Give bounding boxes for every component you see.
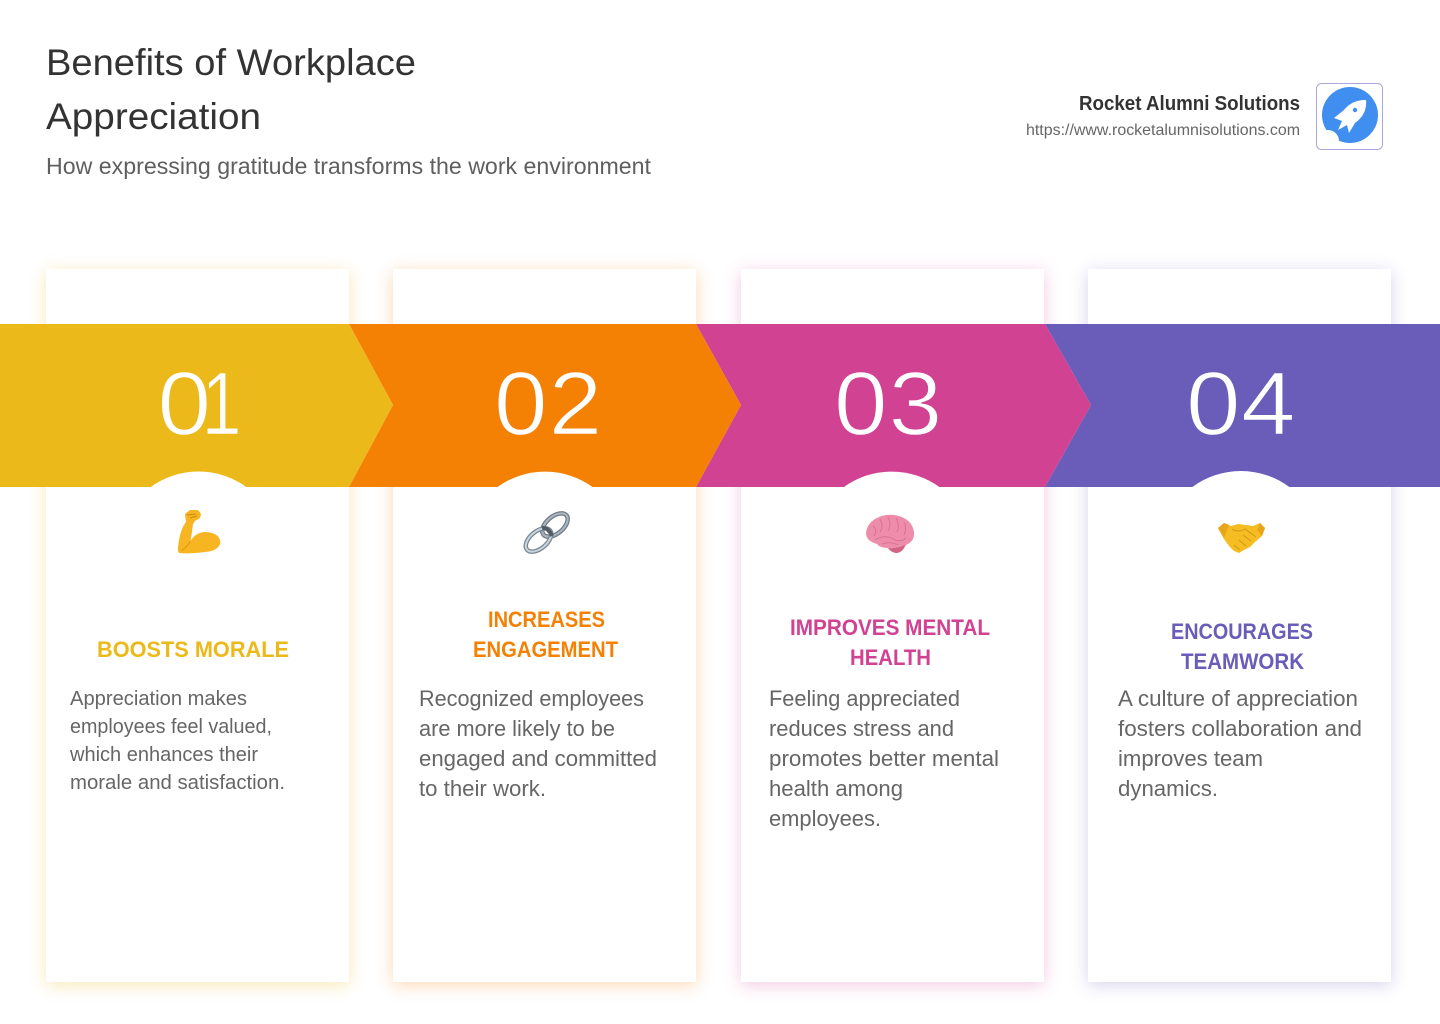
heading: IMPROVES MENTAL (790, 615, 990, 640)
description: employees. (769, 806, 881, 831)
icon: linked chain (522, 509, 572, 556)
description: morale and satisfaction. (70, 771, 285, 794)
heading: HEALTH (850, 645, 931, 670)
description: promotes better mental (769, 746, 999, 771)
title: Benefits of Workplace (46, 42, 416, 83)
description: health among (769, 776, 903, 801)
panel: improves mental health (732, 264, 1052, 994)
subtitle: How expressing gratitude transforms the work environment (46, 153, 652, 179)
number 01: 1 (202, 354, 242, 454)
number 01 (158, 353, 242, 454)
heading: INCREASES (488, 607, 605, 632)
arrow segment 3 (696, 324, 1091, 487)
icon: brain (866, 515, 914, 553)
icon: flexed biceps (178, 510, 220, 553)
arrow segment 4 (1045, 324, 1440, 487)
number 02: 02 (494, 353, 602, 454)
description (1118, 686, 1362, 801)
description: which enhances their (69, 743, 258, 766)
panel: encourages teamwork (1080, 264, 1398, 992)
description: A culture of appreciation (1118, 686, 1358, 711)
heading: TEAMWORK (1181, 649, 1304, 674)
description: reduces stress and (769, 716, 954, 741)
heading (473, 607, 619, 662)
description: to their work. (419, 776, 546, 801)
arrow segment 1 (0, 324, 393, 487)
header title block (46, 42, 652, 179)
icon tab (150, 471, 247, 488)
title (46, 42, 416, 137)
number 04: 04 (1186, 353, 1296, 454)
icon: handshake (1218, 523, 1265, 553)
description: fosters collaboration and (1118, 716, 1362, 741)
arrow segment 2 (349, 324, 741, 487)
icon tab (843, 472, 940, 488)
number 03: 03 (834, 353, 942, 454)
heading: BOOSTS MORALE (97, 637, 289, 662)
icon: rocket logo (1316, 84, 1382, 152)
icon tab (1192, 471, 1290, 488)
description: Appreciation makes (70, 687, 247, 710)
description: Recognized employees (419, 686, 644, 711)
brand block (1026, 83, 1383, 150)
description: improves team (1118, 746, 1263, 771)
heading: ENGAGEMENT (473, 637, 619, 662)
panel: increases engagement (383, 262, 706, 995)
chevron band (0, 324, 1440, 487)
heading (1171, 619, 1313, 674)
description (419, 686, 657, 801)
description: are more likely to be (419, 716, 615, 741)
description (69, 687, 285, 794)
description: dynamics. (1118, 776, 1218, 801)
brand url: https://www.rocketalumnisolutions.com (1026, 122, 1300, 139)
panel: boosts morale (36, 262, 359, 995)
description: engaged and committed (419, 746, 657, 771)
icon tab (497, 472, 593, 488)
title: Appreciation (46, 96, 261, 137)
description (769, 686, 999, 831)
number 01: 0 (158, 353, 211, 454)
description: employees feel valued, (70, 715, 272, 738)
heading: ENCOURAGES (1171, 619, 1313, 644)
brand name: Rocket Alumni Solutions (1079, 93, 1300, 115)
heading (790, 615, 990, 670)
description: Feeling appreciated (769, 686, 960, 711)
